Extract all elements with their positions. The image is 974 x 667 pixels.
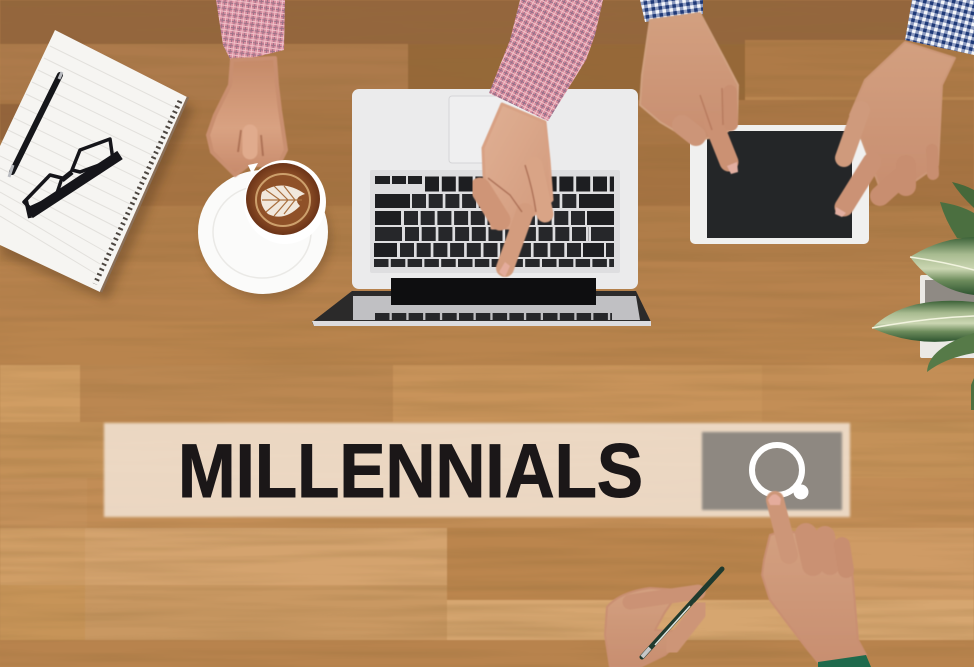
left hand holding cup — [208, 58, 286, 175]
title: MILLENNIALS: MILLENNIALS — [178, 429, 643, 514]
search bar — [104, 423, 850, 517]
pen on notebook — [9, 72, 62, 177]
plant in pot — [872, 182, 974, 410]
icon: magnifying glass — [752, 445, 808, 500]
laptop — [312, 89, 651, 326]
laptop base — [352, 89, 638, 289]
notebook spiral binding — [95, 97, 188, 292]
sleeve: left person — [216, 0, 285, 63]
plant pot — [920, 275, 974, 358]
notebook — [0, 30, 194, 300]
coffee cup with latte art — [244, 160, 326, 244]
latte art — [256, 174, 310, 226]
laptop screen reflection — [312, 291, 651, 326]
writing hand — [605, 588, 698, 667]
trackpad — [449, 96, 539, 163]
glasses — [24, 139, 120, 218]
hand on tablet, left — [640, 13, 738, 174]
hand pointing at search icon — [762, 494, 866, 667]
laptop hinge — [391, 278, 596, 305]
search button — [702, 432, 842, 510]
tablet — [690, 125, 869, 244]
pointing hand on keyboard — [480, 104, 552, 277]
saucer — [198, 170, 331, 298]
hand on tablet, right — [835, 42, 955, 217]
thumb of writing hand — [670, 607, 702, 648]
sleeve: tablet person left — [640, 0, 703, 22]
keyboard — [370, 170, 620, 273]
sleeve: tablet person right — [905, 0, 974, 55]
leaves — [952, 182, 974, 208]
sleeve: pointing person — [489, 0, 603, 121]
pen held by bottom hand — [642, 569, 722, 657]
shirt cuff, bottom hand — [818, 655, 871, 667]
